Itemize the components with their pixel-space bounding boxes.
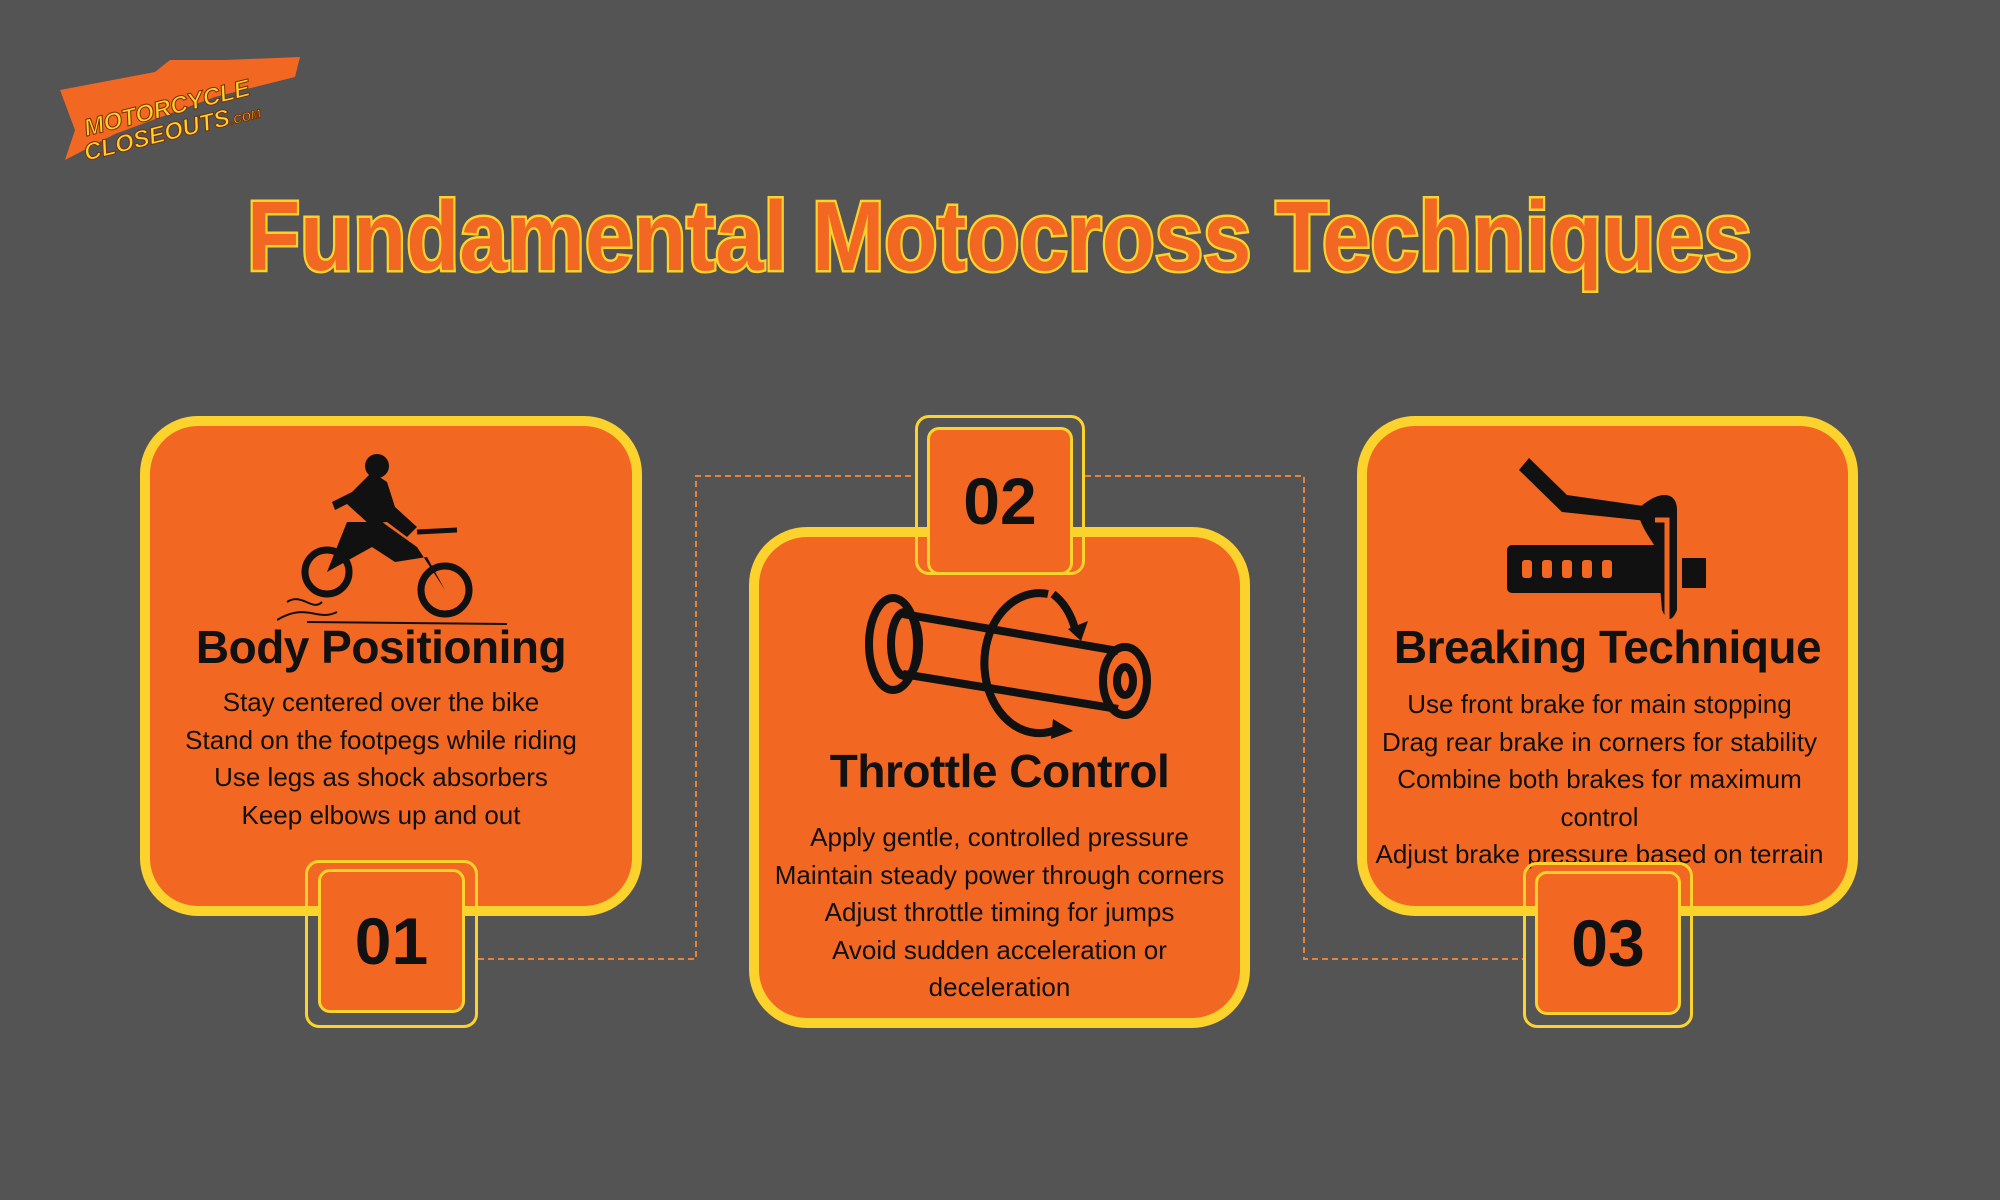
- heading: Breaking Technique: [1394, 621, 1821, 673]
- logo: MOTORCYCLE: [81, 74, 254, 142]
- panel: breaking technique: [1357, 416, 1858, 916]
- text block: Maintain steady power through corners: [775, 860, 1224, 890]
- panel: body positioning: [140, 416, 642, 916]
- icon: throttle grip: [865, 589, 1151, 739]
- text block: Avoid sudden acceleration or: [832, 934, 1167, 964]
- text block: Adjust throttle timing for jumps: [825, 897, 1174, 927]
- text block: Use front brake for main stopping: [1407, 689, 1792, 719]
- text block: control: [1560, 802, 1639, 832]
- text block: [185, 687, 577, 830]
- text block: Adjust brake pressure based on terrain: [1375, 839, 1824, 869]
- logo: [60, 57, 300, 164]
- text block: Drag rear brake in corners for stability: [1382, 726, 1817, 756]
- icon: brake lever: [1507, 458, 1706, 619]
- badge: 01: [305, 860, 478, 1028]
- text block: deceleration: [929, 972, 1070, 1002]
- panel: throttle control: [749, 527, 1250, 1028]
- text block: Keep elbows up and out: [242, 800, 520, 830]
- text block: Combine both brakes for maximum: [1397, 764, 1802, 794]
- title: Fundamental Motocross Techniques: [247, 181, 1752, 291]
- badge: 02: [915, 415, 1085, 575]
- text block: Apply gentle, controlled pressure: [810, 822, 1189, 852]
- heading: Throttle Control: [830, 745, 1169, 797]
- badge: 03: [1523, 862, 1693, 1028]
- badge: 03: 03: [1571, 906, 1645, 980]
- text block: [1375, 689, 1824, 869]
- badge: 02: 02: [963, 464, 1037, 538]
- text block: [775, 822, 1224, 1002]
- icon: motocross rider: [277, 454, 507, 625]
- badge: 01: 01: [355, 904, 428, 978]
- text block: Stay centered over the bike: [223, 687, 539, 717]
- heading: Body Positioning: [196, 621, 566, 673]
- text block: Use legs as shock absorbers: [214, 762, 548, 792]
- text block: Stand on the footpegs while riding: [185, 724, 577, 754]
